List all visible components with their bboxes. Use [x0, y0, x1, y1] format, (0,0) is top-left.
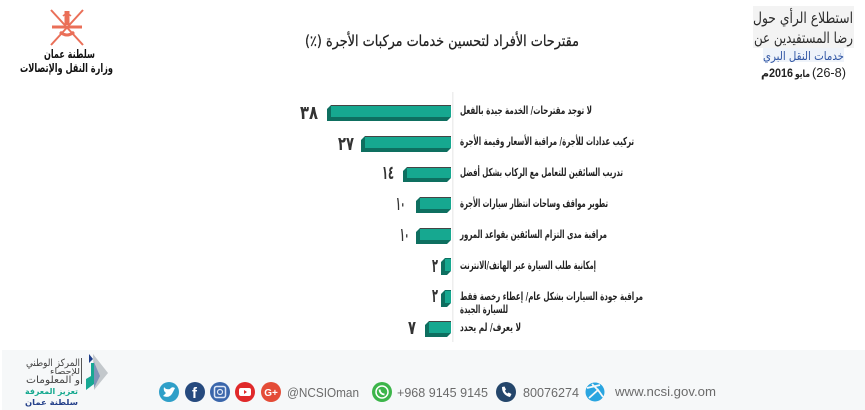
bar row 7: ٢ — [432, 285, 438, 307]
panel: ministry logo: وزارة النقل والإتصالات — [20, 61, 113, 76]
icon: google plus: G+ — [264, 388, 278, 399]
NCSI logo — [25, 354, 108, 407]
bar row 1 — [300, 102, 592, 124]
bar row 7: للسيارة الجيدة — [460, 303, 508, 316]
bar row 4: ١٠ — [396, 193, 405, 215]
icon: globe — [586, 382, 604, 402]
title: مقترحات الأفراد لتحسين خدمات مركبات الأجرة (٪) — [305, 31, 579, 50]
panel: footer — [2, 350, 865, 410]
bar row 2: ٢٧ — [338, 133, 354, 155]
panel: survey heading: خدمات النقل البري — [763, 49, 844, 64]
panel: survey heading — [753, 6, 854, 80]
icon: facebook — [185, 382, 205, 402]
icon: phone — [496, 382, 516, 402]
panel: ministry logo — [20, 10, 113, 76]
bar row 8 — [408, 317, 521, 339]
social handle: @NCSIOman — [287, 385, 359, 400]
phone number: 80076274 — [523, 385, 579, 400]
icon: instagram — [210, 382, 230, 402]
bar row 8: لا يعرف/ لم يحدد — [460, 321, 521, 334]
bar row 6 — [432, 255, 596, 277]
bar row 7: مراقبة جودة السيارات بشكل عام/ إعطاء رخصة فقط — [460, 290, 643, 303]
bar row 3: تدريب السائقين للتعامل مع الركاب بشكل أفضل — [460, 165, 623, 179]
bar row 4: تطوير مواقف وساحات انتظار سيارات الأجرة — [460, 196, 608, 210]
NCSI logo: المركز الوطني — [26, 358, 80, 369]
icon: whatsapp — [372, 382, 392, 402]
survey dates: (26-8) — [812, 65, 846, 80]
bar row 1: ٣٨ — [300, 102, 318, 124]
survey dates: 2016 — [769, 66, 793, 80]
bar row 3: ١٤ — [382, 162, 394, 184]
bar row 8: ٧ — [408, 317, 416, 339]
NCSI logo: و المعلومات — [26, 375, 80, 386]
bar row 2 — [338, 133, 634, 155]
survey dates: مايو — [794, 69, 810, 80]
bar row 4 — [396, 193, 608, 215]
icon: Oman emblem — [51, 10, 83, 45]
bar row 1: لا توجد مقترحات/ الخدمة جيدة بالفعل — [460, 104, 592, 117]
NCSI logo: تعزيز المعرفة — [25, 387, 78, 396]
bar chart — [300, 102, 643, 339]
icon: youtube — [235, 382, 255, 402]
whatsapp number: +968 9145 9145 — [397, 385, 488, 400]
bar row 5: مراقبة مدى التزام السائقين بقواعد المرور — [459, 228, 607, 241]
NCSI logo: للإحصاء — [50, 367, 80, 377]
bar row 6: إمكانية طلب السيارة عبر الهاتف/الانترنت — [460, 259, 596, 272]
survey dates: م — [761, 67, 769, 80]
icon: facebook: f — [192, 385, 198, 402]
icon: twitter — [159, 382, 179, 402]
bar row 2: تركيب عدادات للأجرة/ مراقبة الأسعار وقيمة الأجرة — [460, 134, 634, 148]
bar row 3 — [382, 162, 623, 184]
bar row 5 — [400, 224, 607, 246]
bar row 7 — [432, 285, 643, 316]
website: www.ncsi.gov.om — [614, 384, 716, 399]
icon: google plus — [261, 382, 281, 402]
bar row 6: ٢ — [432, 255, 438, 277]
panel: ministry logo: سلطنة عمان — [44, 47, 95, 61]
bar row 5: ١٠ — [400, 224, 409, 246]
survey dates — [761, 65, 846, 80]
NCSI logo: سلطنة عمان — [25, 398, 78, 407]
